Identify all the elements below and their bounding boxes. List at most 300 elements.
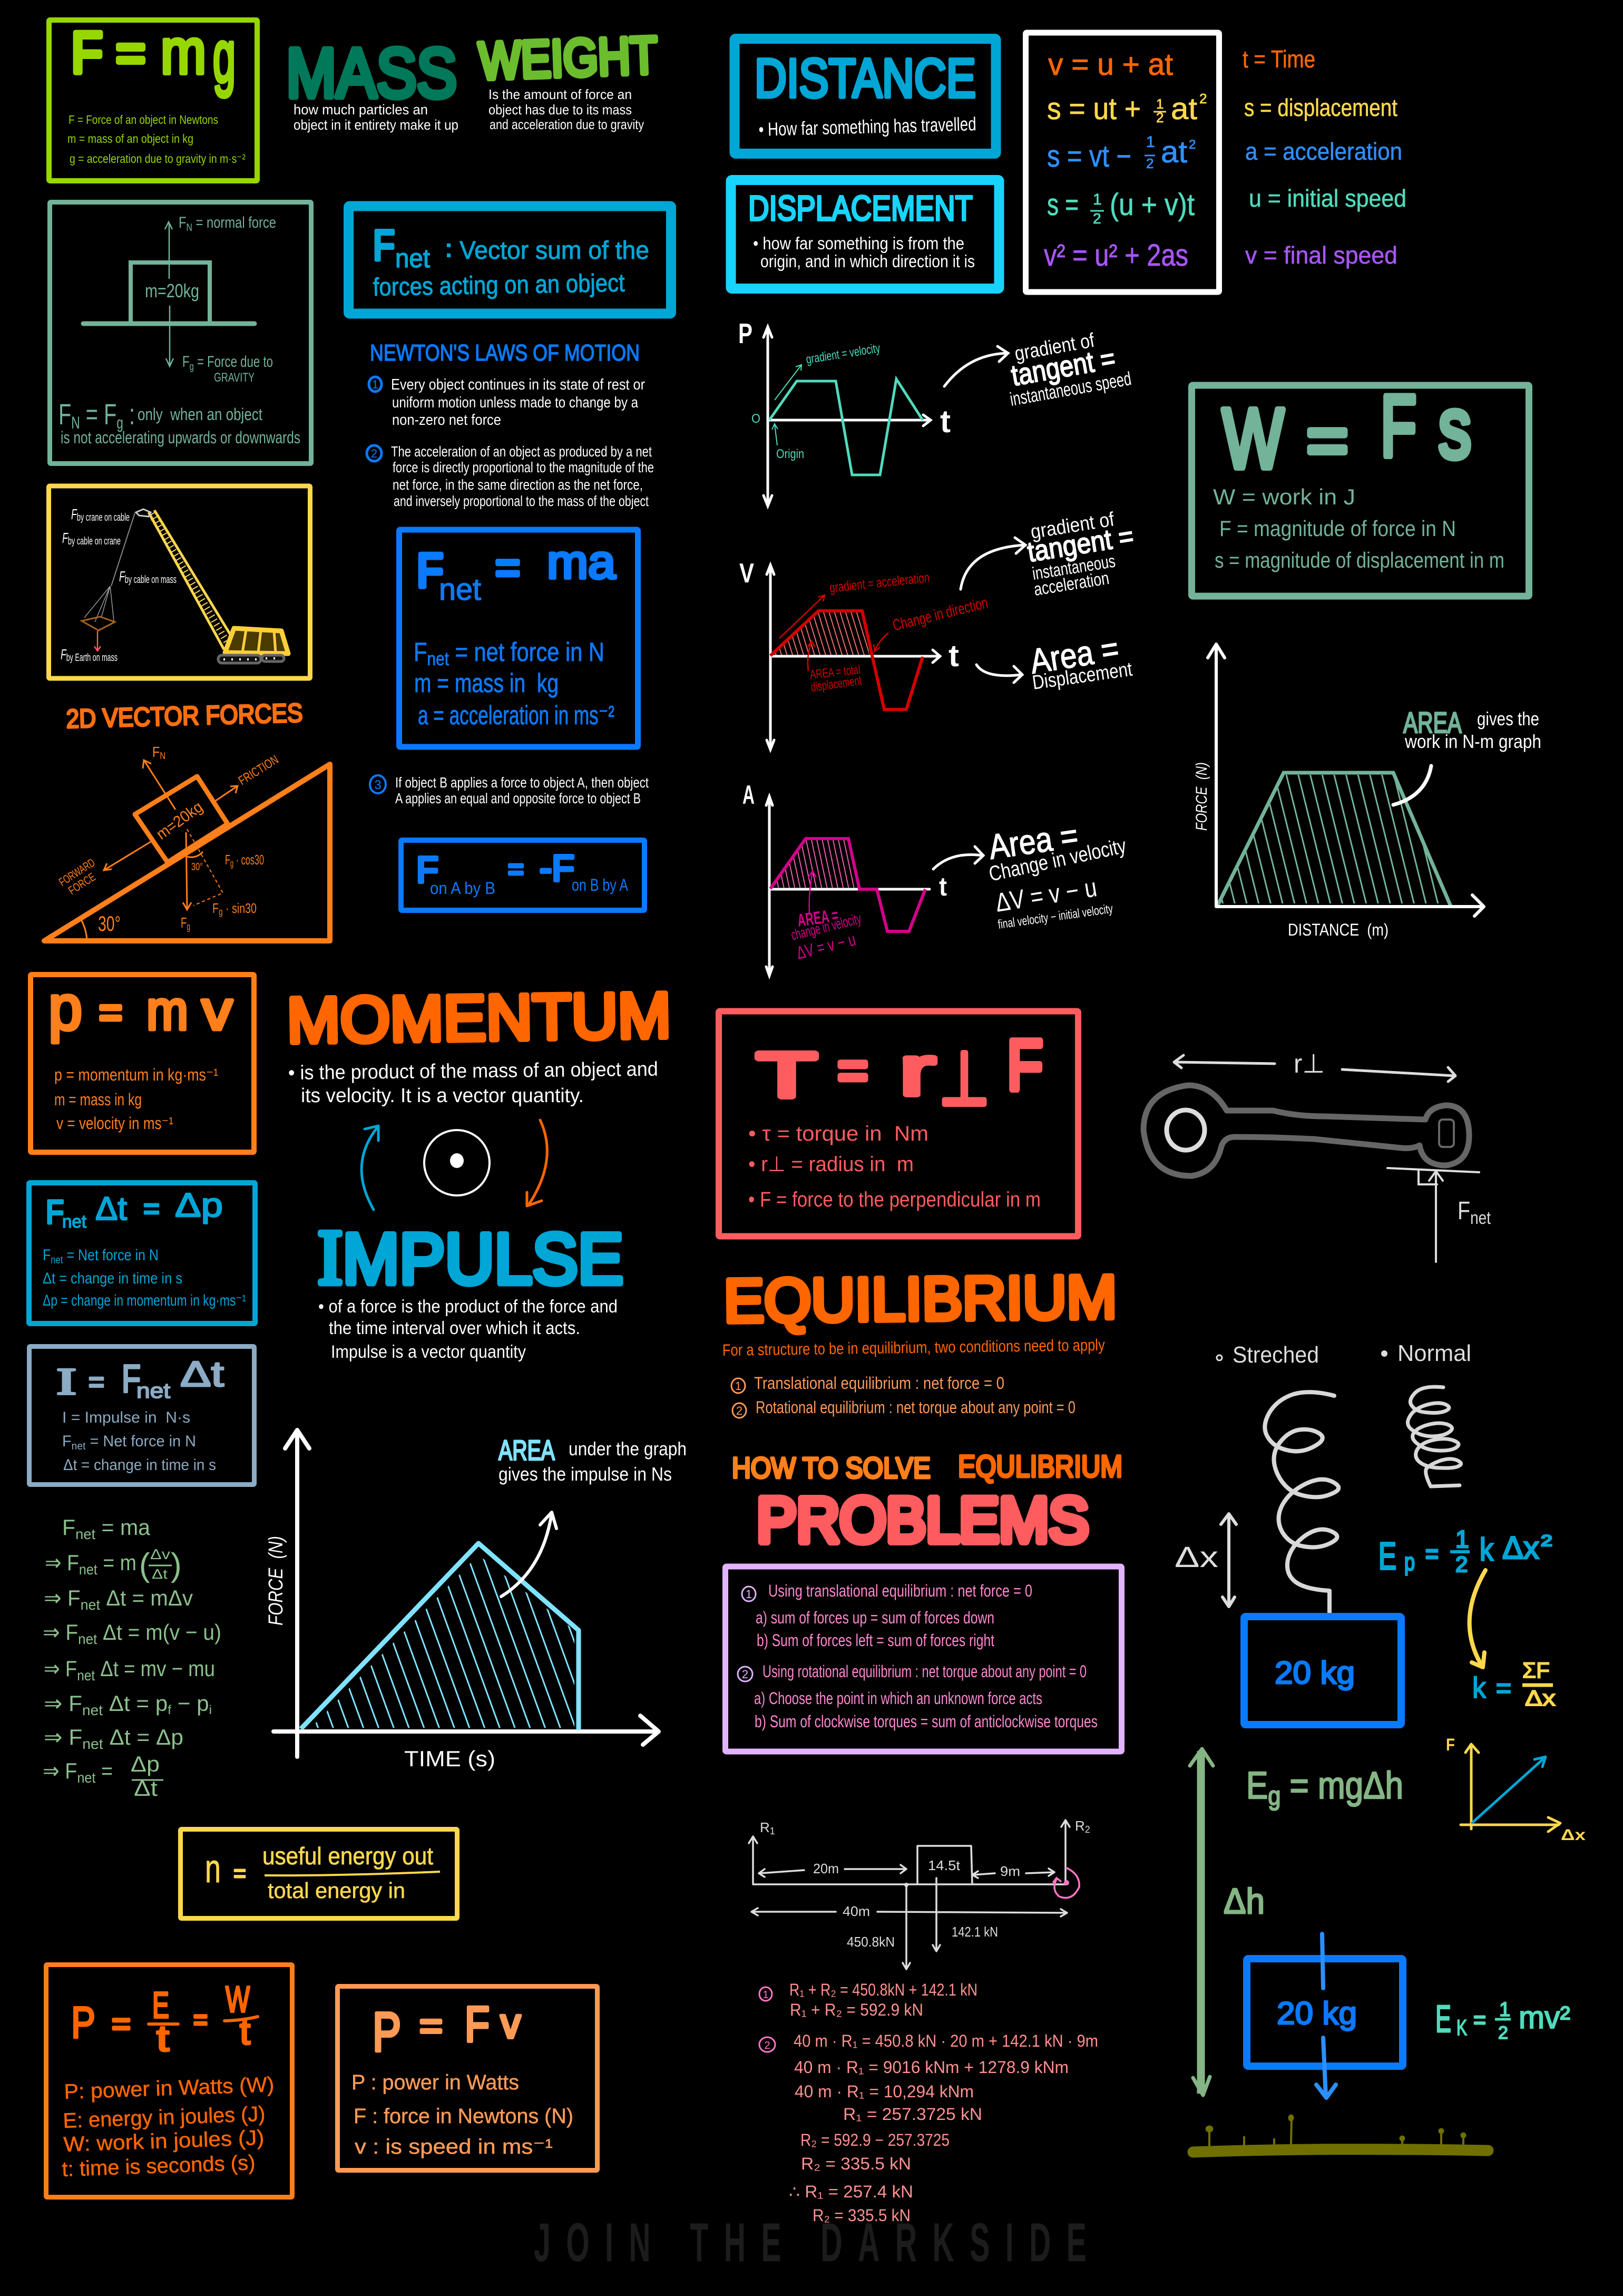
annotations: gradient = acceleration <box>828 569 931 596</box>
number badge: 3 <box>374 778 382 792</box>
formula: elastic potential energy: = <box>1425 1539 1439 1569</box>
box <box>735 39 996 154</box>
equation 2: at <box>1171 92 1197 126</box>
formula: gravitational potential energy: = mgΔh <box>1280 1765 1403 1807</box>
arrow <box>944 346 1008 386</box>
worked solution: R₂ = 592.9 − 257.3725 <box>800 2130 950 2149</box>
annotations <box>751 341 881 461</box>
callout: tangent speed <box>944 329 1133 410</box>
definitions: W = work in J <box>1213 484 1355 509</box>
panel: power Fv <box>337 1986 598 2171</box>
callout: tangent acceleration: gradient of <box>1029 508 1116 543</box>
falling mass: 20 kg <box>1247 1934 1403 2098</box>
derivation: Fnet dt = dp: = <box>95 1758 113 1783</box>
force labels: = Force due to <box>194 353 273 371</box>
step 2: a) Choose the point in which an unknown force acts <box>754 1689 1042 1708</box>
definitions: = Net force in N <box>63 1247 159 1264</box>
chart: velocity-time <box>739 558 990 750</box>
weight definition <box>488 86 644 132</box>
diagram: wrench <box>1143 1049 1491 1262</box>
mass label: m=20kg <box>145 280 199 301</box>
definitions: net <box>72 1441 86 1452</box>
labels: spring states: Streched <box>1233 1342 1319 1368</box>
panel: F=mg <box>49 15 257 181</box>
heading: how to solve equilibrium problems <box>732 1449 1122 1555</box>
callout: tangent speed: tangent = <box>1009 341 1118 392</box>
hanging mass: 20 kg <box>1244 1617 1401 1725</box>
mass definition <box>294 102 458 133</box>
step 2: 2 <box>742 1668 748 1681</box>
crane body <box>225 628 288 654</box>
annotations: ΔV = v − u <box>795 929 858 964</box>
formula <box>71 1979 258 2059</box>
definitions <box>43 1247 246 1309</box>
definitions: P: power in Watts (W) <box>64 2073 275 2104</box>
box <box>731 180 999 289</box>
number badge: 1 <box>372 378 378 391</box>
formula: Δt <box>180 1354 224 1394</box>
formula: t <box>157 2018 169 2059</box>
labels: FORWARD <box>56 856 97 889</box>
derivation: Fnet dt = dp: net <box>75 1526 95 1542</box>
equation 4 <box>1047 188 1195 227</box>
worked solution: R₁ + R₂ = 450.8kN + 142.1 kN <box>789 1980 977 1999</box>
box <box>725 1567 1121 1752</box>
derivation: Fnet dt = dp: ⇒ F <box>45 1550 83 1575</box>
derivation: Fnet dt = dp: i <box>209 1703 212 1717</box>
formula: kinetic energy: K <box>1456 2015 1467 2040</box>
pointer arrow <box>501 1512 556 1597</box>
equation 5: v² = u² + 2as <box>1044 238 1188 273</box>
derivation: Fnet dt = dp: net <box>78 1631 97 1647</box>
callout: tangent acceleration: acceleration <box>1032 568 1110 600</box>
force labels: by cable on crane <box>68 536 121 547</box>
law 3: If object B applies a force to object A, then object <box>395 774 649 791</box>
definitions: F <box>62 1433 72 1450</box>
x axis label: TIME (s) <box>404 1746 495 1771</box>
law 1: non-zero net force <box>392 412 501 429</box>
labels: g <box>187 921 190 932</box>
weight definition: and acceleration due to gravity <box>490 116 644 132</box>
crane sheave <box>136 509 151 517</box>
formula: Δt <box>95 1191 127 1227</box>
mass definition: object in it entirety make it up <box>294 117 458 133</box>
labels: 14.5t <box>928 1857 961 1873</box>
momentum description: its velocity. It is a vector quantity. <box>301 1085 584 1107</box>
force arrow <box>1387 1168 1479 1262</box>
diagram: inclined plane <box>44 744 330 942</box>
force labels: N <box>187 222 192 234</box>
derivation: Fnet dt = dp: Δt = p <box>103 1691 168 1716</box>
formula: elastic potential energy <box>1378 1525 1552 1578</box>
labels: · cos30 <box>233 852 264 868</box>
panel: efficiency: useful energy out <box>262 1842 433 1870</box>
annotations: O <box>751 412 760 426</box>
formula: F <box>46 1194 64 1231</box>
chart: force-extension: F <box>1446 1735 1455 1754</box>
equation 2: 2 <box>1156 110 1164 125</box>
formula: on B by A <box>572 875 629 894</box>
annotations <box>789 871 863 964</box>
equation 3: 2 <box>1189 138 1196 152</box>
callout: area change in velocity: Area = <box>986 815 1080 867</box>
worked solution: R₁ = 257.3725 kN <box>843 2105 982 2124</box>
equation 2 <box>1047 91 1207 126</box>
heading: weight <box>478 25 659 132</box>
panel: equations of motion <box>1025 33 1219 292</box>
derivation: Fnet dt = dp: ⇒ F <box>44 1656 82 1681</box>
definitions: net <box>51 1254 63 1266</box>
force labels: F <box>62 530 69 546</box>
labels: 450.8kN <box>847 1934 895 1950</box>
equation 4: (u + v)t <box>1110 188 1195 222</box>
labels: 1 <box>770 1826 775 1836</box>
panel: distance <box>735 39 996 154</box>
formula <box>46 1186 223 1232</box>
annotations: displacement <box>810 674 863 695</box>
definitions <box>67 113 246 166</box>
arrow: orange <box>527 1120 547 1206</box>
step 2: Using rotational equilibrium : net torque about any point = 0 <box>762 1662 1087 1681</box>
heading: mass: MASS <box>286 34 457 112</box>
formula: -F <box>540 848 574 889</box>
formula <box>416 848 629 898</box>
labels: F <box>152 744 161 760</box>
trace <box>301 1543 579 1730</box>
definitions: W: work in joules (J) <box>63 2126 265 2156</box>
condition 1: Translational equilibrium : net force = 0 <box>754 1374 1004 1393</box>
equation 3: 1 <box>1146 133 1155 151</box>
definitions: I = Impulse in N·s <box>62 1409 190 1426</box>
definitions: m = mass in kg <box>54 1090 142 1109</box>
axes <box>767 565 940 750</box>
impulse description: the time interval over which it acts. <box>329 1318 580 1338</box>
definitions <box>1213 484 1504 572</box>
formula: = <box>419 2005 443 2047</box>
force label: F <box>1458 1197 1473 1225</box>
derivation: Fnet dt = dp: net <box>79 1561 97 1578</box>
badge 2: 2 <box>764 2040 770 2051</box>
law 2: force is directly proportional to the magnitude of the <box>393 459 654 475</box>
formula: F <box>417 544 443 597</box>
equality statement: = F <box>80 397 116 431</box>
derivation: Fnet dt = dp: ( <box>139 1547 150 1583</box>
definitions: F <box>43 1247 52 1264</box>
definitions: s = magnitude of displacement in m <box>1215 548 1504 572</box>
chart: force-extension: Δx <box>1561 1826 1586 1844</box>
derivation: Fnet dt = dp: − p <box>171 1691 209 1716</box>
formula: = <box>89 1366 104 1398</box>
arrow: to spring constant <box>1470 1570 1485 1667</box>
labels: 40m <box>843 1903 870 1919</box>
formula: elastic potential energy: k <box>1480 1532 1494 1567</box>
equation 4: s = <box>1047 188 1079 222</box>
formula: P <box>373 2001 401 2063</box>
heading: momentum: MOMENTUM <box>286 979 671 1056</box>
force labels <box>61 506 177 664</box>
box <box>49 20 257 181</box>
labels: R <box>760 1820 770 1835</box>
derivation: Fnet dt = dp: net <box>82 1736 103 1752</box>
panel: normal force: is not accelerating upwards or downwards <box>61 428 300 447</box>
definitions: • τ = torque in Nm <box>748 1122 928 1145</box>
box <box>29 1183 255 1324</box>
equality statement: N <box>71 413 80 432</box>
law 2: The acceleration of an object as produced by a net <box>391 443 652 460</box>
momentum description <box>288 1058 658 1107</box>
derivation: Fnet dt = dp: = m <box>97 1550 136 1575</box>
formula: ma <box>547 536 616 589</box>
trace <box>769 379 923 475</box>
description: • How far something has travelled <box>758 113 976 140</box>
labels: spring states: Normal <box>1397 1340 1471 1366</box>
block <box>135 776 228 862</box>
variable legend <box>1243 45 1406 269</box>
definitions: E: energy in joules (J) <box>63 2103 266 2133</box>
derivation: Fnet dt = dp: f <box>168 1703 171 1717</box>
law 3 <box>370 774 649 806</box>
definitions: m = mass in kg <box>414 668 559 698</box>
panel: efficiency <box>180 1829 457 1919</box>
formula <box>48 972 233 1043</box>
force labels: F <box>71 506 77 522</box>
cab window bars <box>242 630 276 653</box>
equation 3: s = vt − <box>1047 139 1131 173</box>
extension arrow: Δx <box>1175 1540 1218 1573</box>
panel: impulse-momentum <box>29 1183 255 1324</box>
ring <box>1167 1110 1205 1150</box>
derivation: Fnet dt = dp: F <box>62 1515 76 1540</box>
equality statement: F <box>58 397 76 431</box>
chart: force-time impulse: gives the impulse in Ns <box>498 1463 672 1485</box>
x axis label: DISTANCE (m) <box>1288 920 1389 939</box>
definitions: • r⊥ = radius in m <box>748 1153 914 1176</box>
derivation: Fnet dt = dp: Δt <box>134 1776 158 1801</box>
badge 2 <box>759 2037 775 2052</box>
worked solution: R₁ + R₂ = 592.9 kN <box>790 2000 923 2019</box>
formula: E <box>152 1984 169 2026</box>
y axis label: FORCE (N) <box>1193 762 1210 831</box>
box <box>30 1346 254 1484</box>
area hatch <box>773 612 869 655</box>
labels: m=20kg <box>153 798 206 843</box>
formula: elastic potential energy: p <box>1404 1548 1415 1575</box>
trace <box>770 839 925 931</box>
definition: Vector sum of the <box>459 237 649 265</box>
derivation: Fnet dt = dp: net <box>81 1597 100 1613</box>
condition 1: 1 <box>735 1379 741 1393</box>
formula: net <box>62 1212 87 1232</box>
socket <box>1439 1120 1454 1147</box>
callout: area change in velocity: Change in velocity <box>987 834 1128 886</box>
heading: DISTANCE <box>755 48 976 109</box>
formula: Δp <box>175 1186 223 1224</box>
chart: force-time impulse: under the graph <box>569 1438 687 1460</box>
force labels: F <box>179 214 188 231</box>
derivation: Fnet dt = dp: Δt = mΔv <box>100 1585 193 1610</box>
derivation: Fnet dt = dp: Δt = Δp <box>103 1725 183 1749</box>
labels: 20m <box>813 1861 839 1876</box>
callout: area change in velocity: ΔV = v − u <box>993 872 1099 918</box>
panel: Fnet = ma <box>399 530 638 747</box>
law 3: A applies an equal and opposite force to object B <box>395 790 641 806</box>
height arrow: Δh <box>1224 1881 1265 1921</box>
formula: p <box>48 972 82 1043</box>
chart: force-distance: work in N-m graph <box>1404 731 1541 752</box>
law 1: uniform motion unless made to change by a <box>392 394 639 411</box>
formula: gravitational potential energy: E <box>1246 1765 1272 1807</box>
formula: F <box>1007 1025 1043 1105</box>
panel: steps <box>725 1567 1121 1752</box>
formula: kinetic energy <box>1435 1998 1570 2043</box>
panel: impulse formula <box>30 1346 254 1484</box>
description: origin, and in which direction it is <box>760 251 975 271</box>
chart: force-extension <box>1446 1735 1586 1844</box>
definitions: Δt = change in time in s <box>43 1270 182 1287</box>
derivation: Fnet dt = dp: = ma <box>95 1515 151 1540</box>
formula: = <box>193 2004 208 2036</box>
formula: v <box>202 980 233 1042</box>
condition 2: Rotational equilibrium : net torque about any point = 0 <box>756 1398 1076 1417</box>
definitions: F : force in Newtons (N) <box>354 2105 573 2128</box>
panel: Newton's third law formula <box>401 840 644 910</box>
callout: tangent acceleration: instantaneous <box>1031 551 1117 584</box>
panel: power E/t <box>46 1965 292 2197</box>
callout: area displacement: Displacement <box>1031 658 1134 694</box>
definitions: g = acceleration due to gravity in m·s⁻² <box>70 152 246 166</box>
chart: acceleration-time: t <box>939 872 947 901</box>
step 1: b) Sum of forces left = sum of forces right <box>757 1631 994 1650</box>
formula: elastic potential energy: E <box>1378 1535 1396 1578</box>
equation 3: 2 <box>1146 155 1153 171</box>
crane jib <box>149 510 233 649</box>
box <box>180 1829 457 1919</box>
badge 1 <box>759 1987 772 2001</box>
heading: DISPLACEMENT <box>748 189 973 228</box>
box <box>1192 385 1529 596</box>
intro: For a structure to be in equilibrium, two conditions need to apply <box>722 1336 1105 1359</box>
force labels <box>179 214 276 385</box>
wrench outline <box>1143 1085 1469 1176</box>
panel: net force definition: forces acting on an object <box>373 269 625 301</box>
heading: 2D vector forces: 2D VECTOR FORCES <box>66 698 303 734</box>
box <box>399 530 638 747</box>
formula: spring constant: Δx <box>1525 1686 1556 1710</box>
equation 1: v = u + at <box>1048 47 1173 82</box>
formula <box>417 536 616 607</box>
labels: R <box>1075 1818 1085 1834</box>
falling mass: 20 kg: 20 kg <box>1277 1996 1357 2031</box>
step 2: b) Sum of clockwise torques = sum of anticlockwise torques <box>755 1712 1098 1731</box>
equilibrium conditions <box>722 1336 1105 1418</box>
definitions: Δt = change in time in s <box>63 1456 216 1474</box>
derivation: Fnet dt = dp: Δv <box>150 1546 170 1562</box>
labels: 142.1 kN <box>952 1924 998 1940</box>
radius label: r⊥ <box>1294 1049 1325 1078</box>
callout: area change in velocity: final velocity − initial velocity <box>997 902 1114 932</box>
definitions: Δp = change in momentum in kg·ms⁻¹ <box>43 1292 246 1309</box>
annotations: gradient = velocity <box>805 341 881 367</box>
box <box>46 1965 292 2197</box>
worked solution: ∴ R₁ = 257.4 kN <box>789 2182 913 2201</box>
box <box>31 975 254 1152</box>
y axis label: FORCE (N) <box>265 1536 287 1626</box>
labels: 2 <box>1085 1824 1090 1835</box>
equation 3: at <box>1161 135 1187 169</box>
labels: N <box>160 751 165 761</box>
formula: kinetic energy: 2 <box>1498 2023 1508 2043</box>
definitions <box>62 2073 275 2181</box>
formula <box>71 15 236 98</box>
formula: spring constant: ΣF <box>1522 1658 1550 1682</box>
formula: net <box>136 1379 170 1403</box>
formula: = <box>508 852 524 886</box>
variable legend: t = Time <box>1243 45 1315 73</box>
hanging mass: 20 kg: 20 kg <box>1275 1655 1355 1690</box>
derivation: Fnet dt = dp: ⇒ F <box>44 1725 82 1749</box>
formula: kinetic energy: 1 <box>1499 1999 1510 2021</box>
definitions: a = acceleration in ms⁻² <box>418 701 614 730</box>
callout: area change in velocity <box>933 815 1128 932</box>
icon: stretched spring <box>1265 1392 1338 1613</box>
equation 3 <box>1047 133 1196 173</box>
formula <box>1223 377 1471 485</box>
trapezoid <box>1218 773 1451 906</box>
condition 2: 2 <box>736 1404 742 1417</box>
heading: weight: WEIGHT <box>478 25 659 90</box>
law 2: and inversely proportional to the mass of the object <box>394 493 649 509</box>
equation 4: 2 <box>1093 210 1101 227</box>
derivation: Fnet dt = dp <box>43 1515 221 1801</box>
force labels: F <box>61 646 67 663</box>
heading: how to solve equilibrium problems: PROBLEMS <box>757 1485 1089 1555</box>
mass definition: how much particles an <box>294 102 428 118</box>
variable legend: a = acceleration <box>1245 138 1402 165</box>
symbol: F <box>373 222 395 269</box>
formula: net <box>439 572 481 607</box>
formula: I <box>56 1360 76 1403</box>
incline <box>44 764 330 941</box>
derivation: Fnet dt = dp: ⇒ F <box>43 1620 81 1645</box>
formula: = <box>495 543 520 593</box>
formula: v <box>501 2000 521 2047</box>
number badge <box>370 775 386 793</box>
arrow <box>961 538 1025 589</box>
callout: tangent acceleration <box>961 508 1136 600</box>
equation 2: s = ut + <box>1047 92 1141 126</box>
labels: · sin30 <box>223 900 257 916</box>
callout: area displacement <box>976 628 1134 694</box>
labels: 30° <box>98 912 121 936</box>
force labels: GRAVITY <box>214 371 255 385</box>
step 1: 1 <box>746 1588 752 1601</box>
formula: = <box>143 1192 160 1225</box>
annotations: Origin <box>776 447 804 461</box>
track wheels <box>223 658 281 659</box>
variable legend: s = displacement <box>1244 94 1397 121</box>
definitions: • F = force to the perpendicular in m <box>748 1188 1041 1211</box>
wheel <box>424 1130 490 1195</box>
derivation: Fnet dt = dp: ) <box>171 1547 182 1583</box>
labels: g <box>230 858 233 869</box>
formula: F <box>1381 377 1416 474</box>
chart: force-distance: gives the <box>1477 708 1539 729</box>
diagram: rotation <box>361 1120 547 1210</box>
diagram: beam free-body <box>749 1818 1090 1969</box>
derivation: Fnet dt = dp: ⇒ F <box>44 1585 82 1610</box>
box <box>337 1986 598 2171</box>
step 1 <box>742 1581 1032 1650</box>
